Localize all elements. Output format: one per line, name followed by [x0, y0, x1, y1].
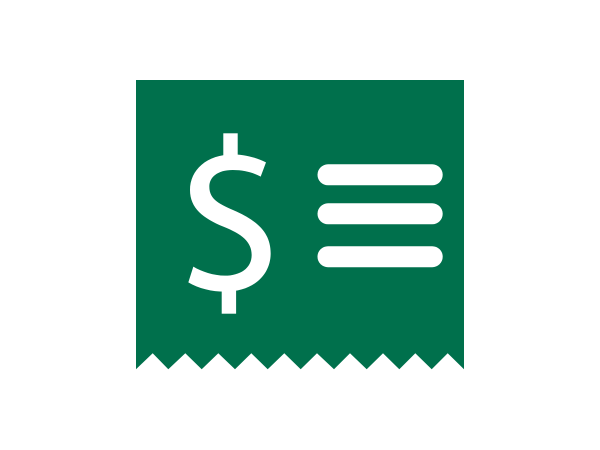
receipt line items [318, 164, 443, 267]
receipt paper with torn zigzag edge [136, 80, 464, 369]
icon: dollar sign [188, 133, 271, 314]
